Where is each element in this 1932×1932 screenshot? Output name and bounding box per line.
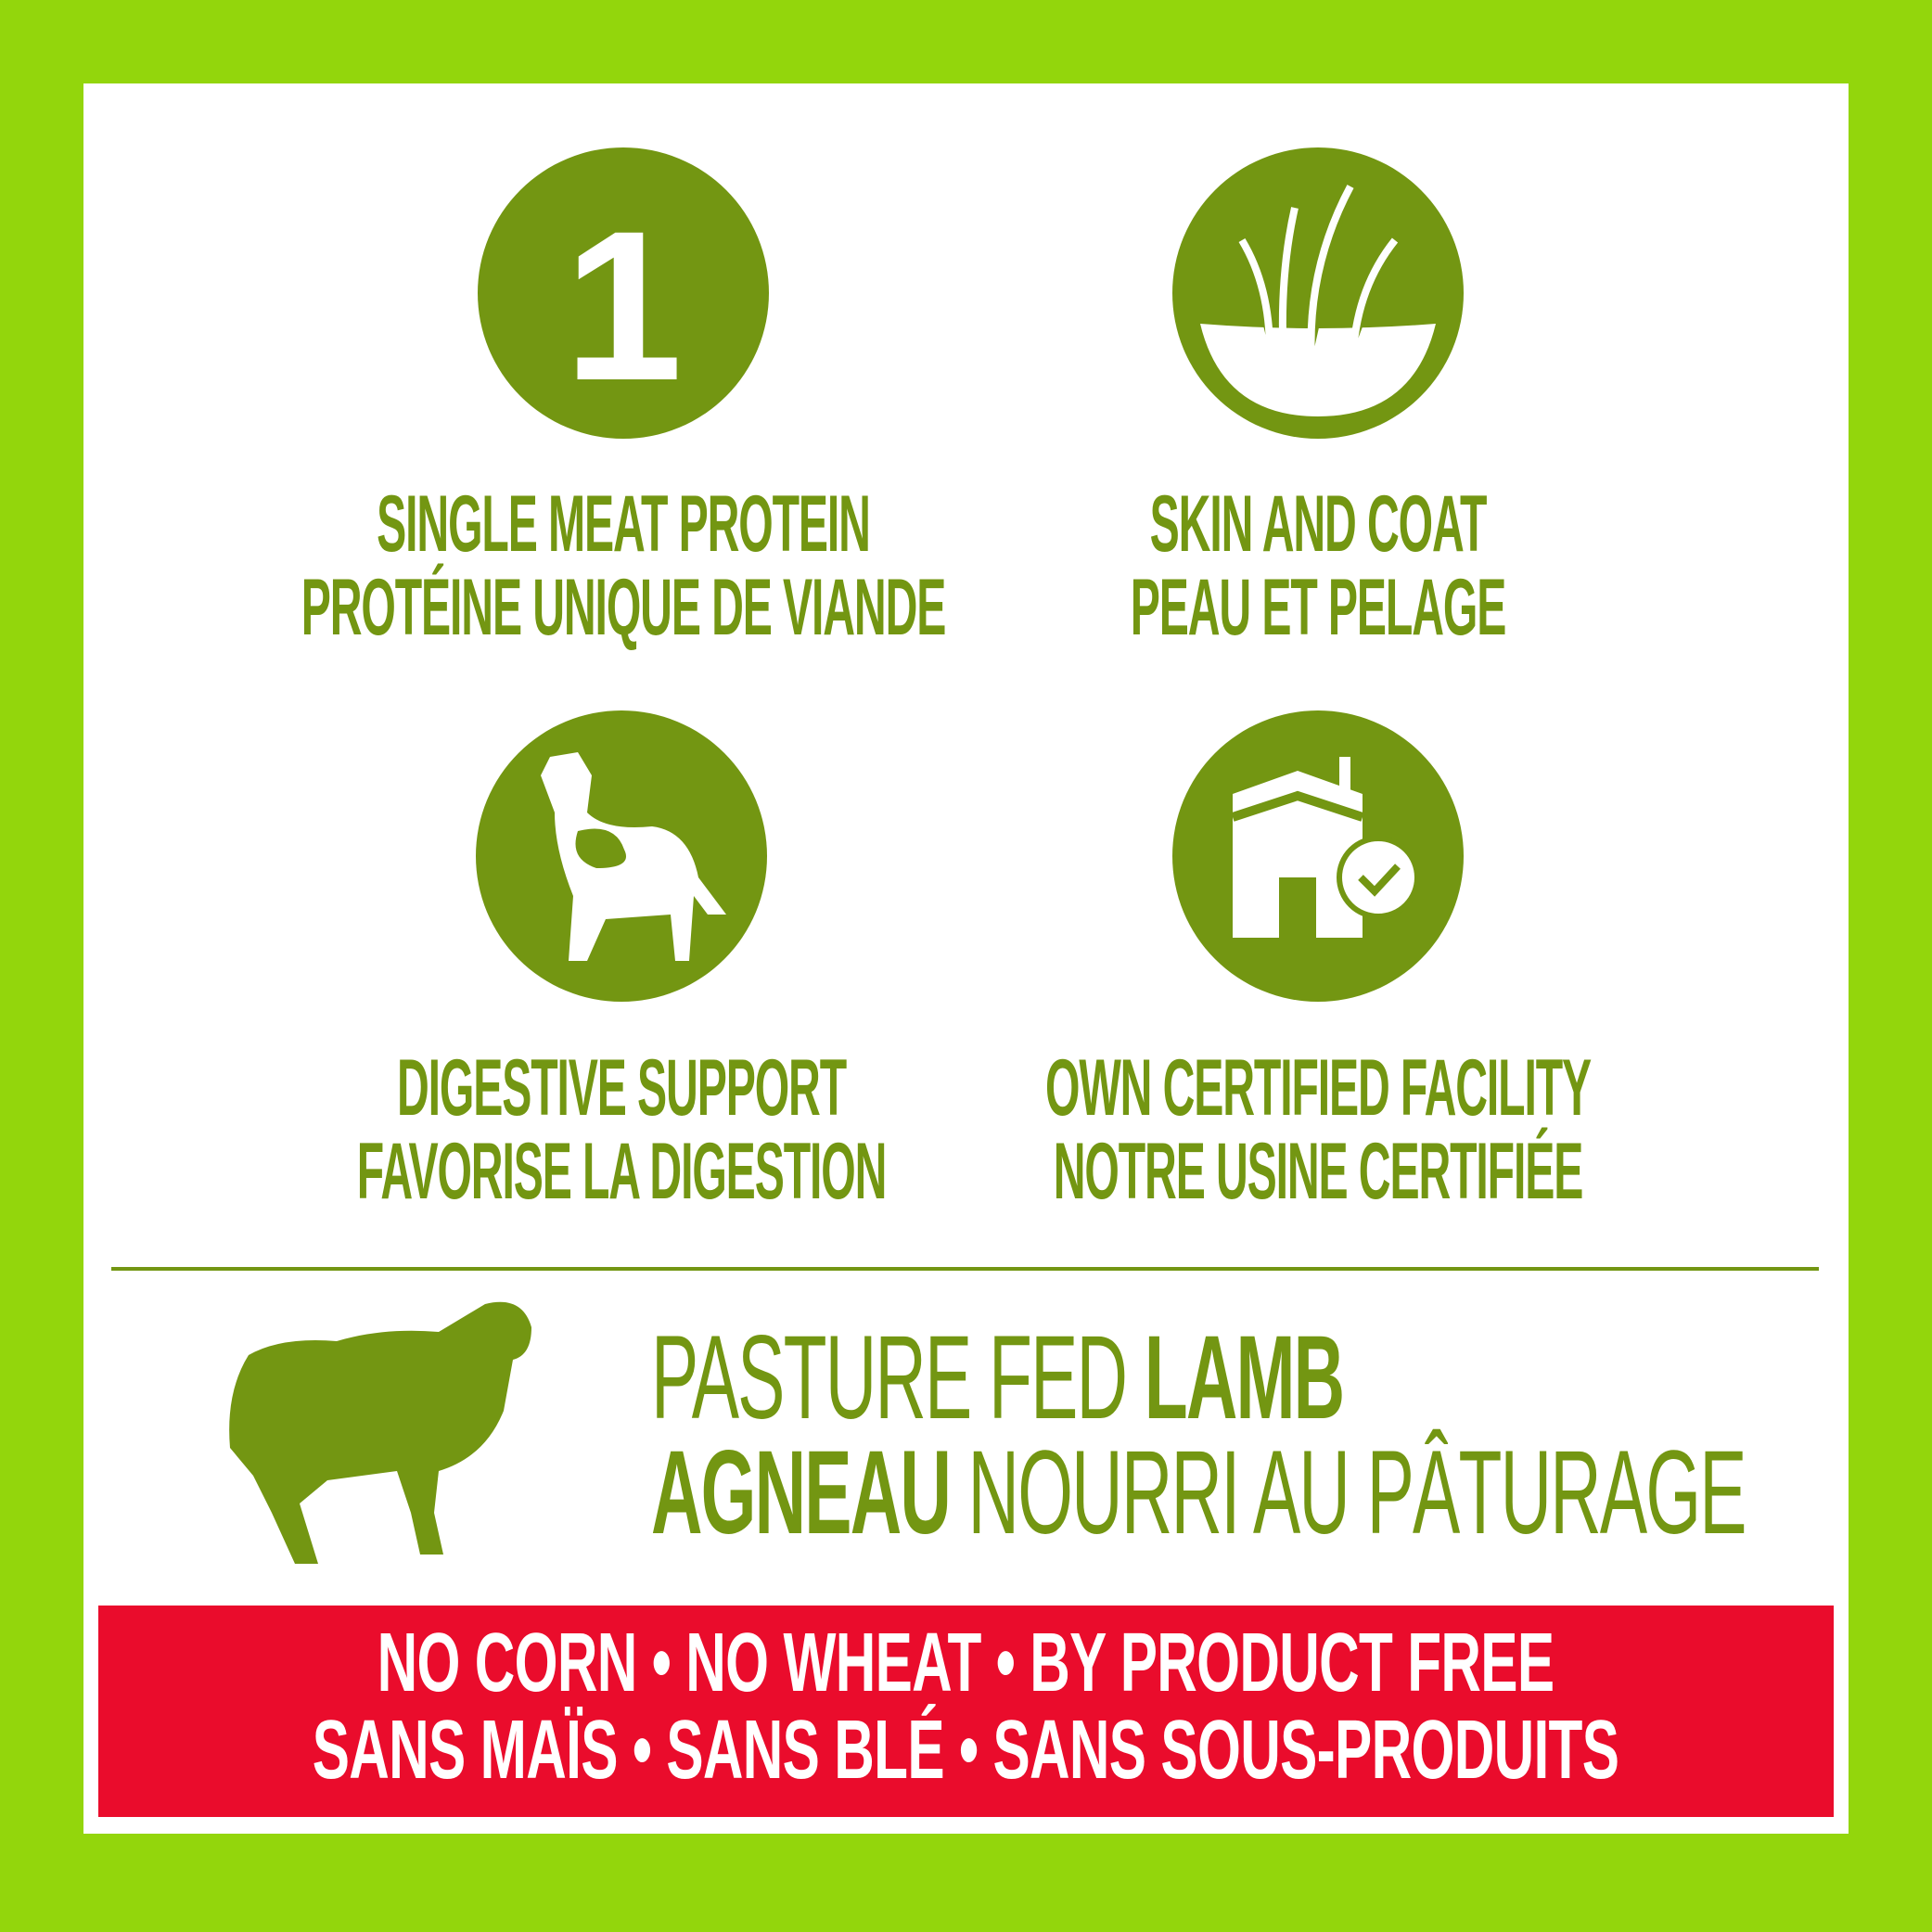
heading: pasture fed lamb: PASTURE FED LAMB (651, 1311, 1343, 1444)
text: skin and coat: PEAU ET PELAGE (1131, 563, 1505, 652)
heading: pasture fed lamb (651, 1311, 1746, 1559)
text: own certified facility: OWN CERTIFIED FACILITY (1045, 1043, 1591, 1132)
text: skin and coat: SKIN AND COAT (1150, 480, 1486, 569)
icon: hair strands (1172, 147, 1464, 439)
text: digestive support: DIGESTIVE SUPPORT (397, 1043, 846, 1132)
banner: no corn (98, 1606, 1834, 1817)
text: single meat protein (301, 480, 945, 652)
text: skin and coat (1131, 480, 1505, 652)
text: digestive support (357, 1043, 886, 1216)
banner text: NO CORN • NO WHEAT • BY PRODUCT FREE (377, 1617, 1554, 1709)
icon: number 1: 1 (564, 186, 683, 425)
text: single meat protein: SINGLE MEAT PROTEIN (377, 480, 870, 569)
icon: number 1 (478, 147, 769, 439)
text: single meat protein: PROTÉINE UNIQUE DE VIANDE (301, 563, 945, 652)
icon: dog (476, 710, 767, 1002)
text: own certified facility (1045, 1043, 1592, 1216)
banner text: SANS MAÏS • SANS BLÉ • SANS SOUS-PRODUITS (313, 1704, 1619, 1797)
banner text (313, 1617, 1619, 1797)
icon: sheep (229, 1302, 531, 1564)
heading: pasture fed lamb: AGNEAU NOURRI AU PÂTURAGE (651, 1427, 1746, 1559)
icon: certified facility (1172, 710, 1464, 1002)
text: digestive support: FAVORISE LA DIGESTION (357, 1127, 886, 1216)
text: own certified facility: NOTRE USINE CERTIFIÉE (1054, 1127, 1582, 1216)
